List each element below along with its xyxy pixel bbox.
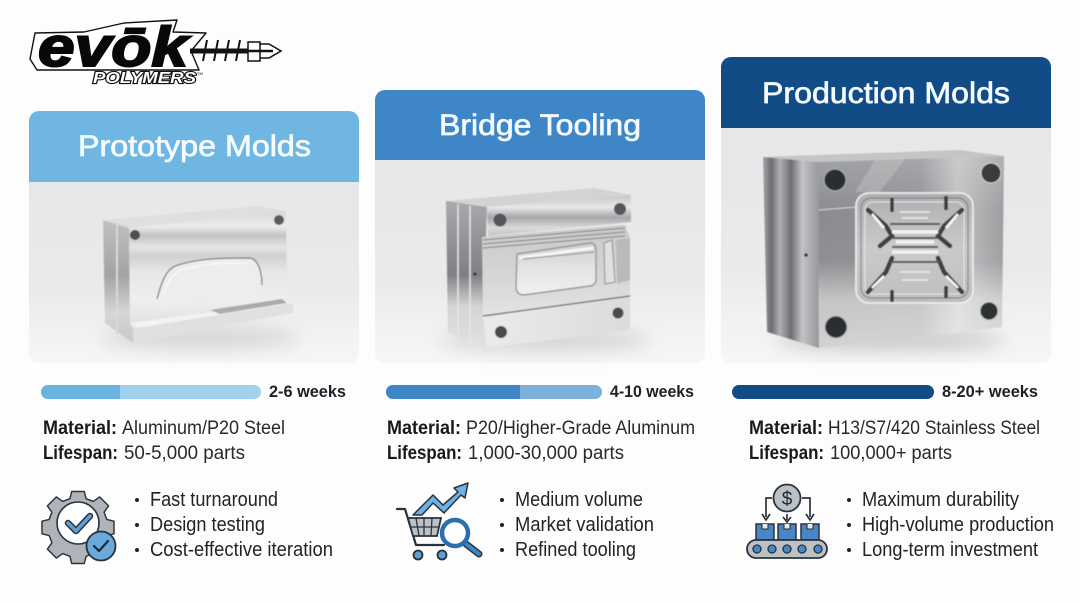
timeline bar: 8-20+ weeks: 8-20+ weeks [942, 382, 1038, 401]
specs: production: H13/S7/420 Stainless Steel [828, 418, 1040, 439]
photo: aluminum prototype mold [29, 182, 359, 363]
bullet list: prototype [135, 489, 333, 561]
icon: conveyor with boxes and coin [747, 484, 827, 558]
specs: production: 100,000+ parts [830, 443, 952, 464]
bullet list: production: Maximum durability [862, 489, 1019, 511]
specs: prototype: Material: [43, 418, 117, 439]
bullet list: prototype: Design testing [150, 514, 265, 536]
photo: bridge tooling mold [375, 160, 705, 363]
icon: shopping cart with growth arrow and magnifier [397, 483, 479, 560]
icon: conveyor with boxes and coin: $ [782, 489, 793, 510]
heading: prototype molds: Prototype Molds [78, 130, 311, 163]
panel: prototype molds [29, 111, 359, 564]
bullet list: bridge: Market validation [515, 514, 654, 536]
panel: bridge tooling [375, 90, 705, 561]
specs: production: Lifespan: [749, 443, 824, 464]
card header: prototype [29, 111, 359, 182]
bullet list: production: High-volume production [862, 514, 1054, 536]
specs: production: Material: [749, 418, 823, 439]
panel: production molds [721, 57, 1054, 561]
specs: bridge [387, 418, 695, 464]
logo: evok polymers: evōk [38, 15, 191, 78]
specs: prototype: Lifespan: [43, 443, 118, 464]
card header: bridge [375, 90, 705, 160]
icon: gear with checkmark [42, 492, 115, 564]
bullet list: production: Long-term investment [862, 539, 1038, 561]
specs: production [749, 418, 1040, 464]
bullet list: bridge: Refined tooling [515, 539, 636, 561]
specs: bridge: 1,000-30,000 parts [468, 443, 624, 464]
logo: evok polymers: POLYMERS [93, 70, 196, 87]
heading: production molds: Production Molds [762, 77, 1010, 110]
timeline bar: 4-10 weeks [386, 382, 694, 401]
bullet list: bridge: Medium volume [515, 489, 643, 511]
bullet list: prototype: Fast turnaround [150, 489, 278, 511]
photo: production steel mold [721, 128, 1051, 363]
card header: production [721, 57, 1051, 128]
specs: bridge: P20/Higher-Grade Aluminum [466, 418, 695, 439]
bullet list: prototype: Cost-effective iteration [150, 539, 333, 561]
timeline bar: 8-20+ weeks [732, 382, 1038, 401]
timeline bar: 4-10 weeks: 4-10 weeks [610, 382, 694, 401]
timeline bar: 2-6 weeks [41, 382, 346, 401]
specs: bridge: Material: [387, 418, 461, 439]
specs: bridge: Lifespan: [387, 443, 462, 464]
bullet list: bridge [500, 489, 654, 561]
timeline bar: 2-6 weeks: 2-6 weeks [269, 382, 346, 401]
bullet list: production [847, 489, 1054, 561]
logo: evok polymers: TM [197, 71, 203, 76]
specs: prototype: Aluminum/P20 Steel [122, 418, 285, 439]
heading: bridge tooling: Bridge Tooling [439, 109, 641, 142]
logo: evok polymers [30, 15, 281, 87]
specs: prototype: 50-5,000 parts [124, 443, 245, 464]
specs: prototype [43, 418, 285, 464]
